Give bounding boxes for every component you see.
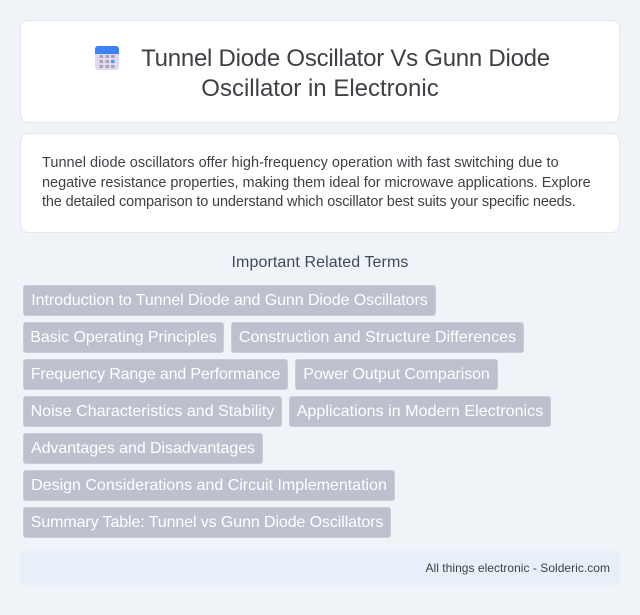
panel: title card: [20, 20, 620, 123]
tag: design considerations: Design Considerations and Circuit Implementation: [31, 477, 387, 494]
tag: power output: Power Output Comparison: [303, 366, 490, 383]
tag: introduction: [23, 285, 436, 316]
tag: introduction: Introduction to Tunnel Diode and Gunn Diode Oscillators: [31, 292, 428, 309]
tag: construction: Construction and Structure Differences: [239, 329, 516, 346]
tag: construction: [231, 322, 524, 353]
text: description: the detailed comparison to understand which oscillator best suits your specific needs.: [42, 194, 576, 210]
title: Oscillator in Electronic: [201, 74, 439, 102]
text: description: Tunnel diode oscillators offer high-frequency operation with fast switching due to: [42, 155, 559, 171]
tag: advantages: Advantages and Disadvantages: [31, 440, 255, 457]
panel: description card: [20, 133, 620, 233]
footer: [20, 551, 620, 585]
text: description: [42, 155, 591, 210]
title: Tunnel Diode Oscillator Vs Gunn Diode: [141, 45, 550, 72]
text: description: negative resistance properties, making them ideal for microwave applications. Explore: [42, 174, 591, 190]
tag: frequency range: Frequency Range and Performance: [31, 366, 280, 383]
tag: noise: Noise Characteristics and Stability: [31, 403, 274, 420]
tag: basic operating principles: [23, 322, 224, 353]
tag: summary table: [23, 507, 391, 538]
tag: advantages: [23, 433, 263, 464]
title: [141, 45, 550, 102]
tag: power output: [295, 359, 498, 390]
tag: summary table: Summary Table: Tunnel vs Gunn Diode Oscillators: [31, 514, 383, 531]
tag: noise: [23, 396, 282, 427]
footer text: All things electronic - Solderic.com: [426, 561, 610, 575]
tag list: [23, 285, 551, 538]
tag: frequency range: [23, 359, 288, 390]
tag: applications: [289, 396, 551, 427]
heading: related terms: Important Related Terms: [232, 254, 408, 271]
tag: design considerations: [23, 470, 395, 501]
tag: applications: Applications in Modern Electronics: [297, 403, 543, 420]
tag: basic operating principles: Basic Operating Principles: [30, 329, 217, 346]
icon: calendar: [95, 46, 119, 70]
